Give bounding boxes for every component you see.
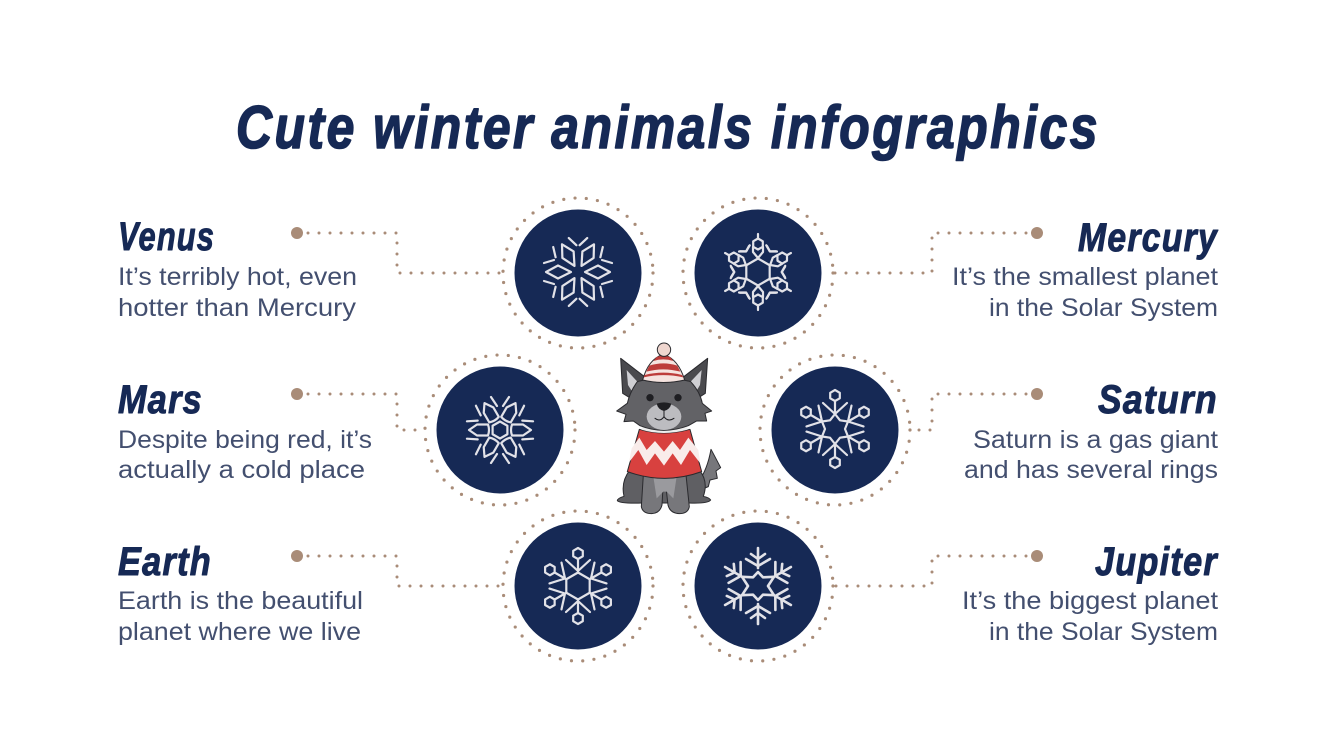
text: Mars description: actually a cold place — [118, 456, 365, 484]
illustration: wolf in winter hat and sweater — [617, 343, 721, 514]
connector: Mars — [291, 388, 426, 430]
heading: Mercury: Mercury — [1078, 216, 1218, 260]
head — [617, 378, 712, 430]
text: Venus description: hotter than Mercury — [118, 294, 357, 322]
connector: Earth — [291, 550, 503, 586]
icon: snowflake badge top left — [503, 198, 653, 348]
panel: Mercury — [952, 216, 1218, 322]
text: Mars description: Despite being red, it’s — [118, 426, 372, 454]
hat pompom — [657, 343, 671, 356]
panel: Jupiter — [962, 540, 1219, 646]
tail — [698, 449, 721, 490]
heading: Jupiter: Jupiter — [1095, 540, 1219, 584]
panel: Mars — [118, 378, 372, 484]
haunches and feet — [617, 470, 711, 503]
text: Saturn description: Saturn is a gas giant — [973, 426, 1218, 454]
icon: snowflake badge bottom left — [503, 511, 653, 661]
icon: snowflake badge bottom right — [683, 511, 833, 661]
front legs — [641, 475, 689, 514]
heading: Earth: Earth — [118, 540, 212, 584]
muzzle — [647, 403, 681, 430]
hat — [643, 354, 685, 382]
panel: Saturn — [964, 378, 1218, 484]
text: Venus description: It’s terribly hot, even — [118, 263, 357, 291]
heading: Mars: Mars — [118, 378, 203, 422]
text: Mercury description: It’s the smallest planet — [952, 263, 1218, 291]
connector: Jupiter — [833, 550, 1043, 586]
title: Cute winter animals infographics — [236, 94, 1100, 161]
text: Jupiter description: in the Solar System — [989, 618, 1218, 646]
belly — [653, 477, 677, 498]
connector: Saturn — [910, 388, 1043, 430]
connector: Venus — [291, 227, 503, 273]
text: Earth description: planet where we live — [118, 618, 361, 646]
icon: snowflake badge middle right — [760, 355, 910, 505]
connector: Mercury — [833, 227, 1043, 273]
text: Jupiter description — [962, 587, 1218, 646]
text: Mercury description — [952, 263, 1218, 322]
sweater zigzag — [629, 438, 700, 466]
text: Saturn description: and has several rings — [964, 456, 1218, 484]
collar — [642, 428, 687, 432]
text: Venus description — [118, 263, 357, 322]
ears — [621, 358, 647, 400]
eyes and nose — [646, 394, 682, 411]
heading: Venus: Venus — [118, 215, 215, 259]
icon: snowflake badge top right — [683, 198, 833, 348]
text: Jupiter description: It’s the biggest planet — [962, 587, 1218, 615]
text: Mars description — [118, 426, 372, 484]
text: Mercury description: in the Solar System — [989, 294, 1218, 322]
panel: Earth — [118, 540, 363, 646]
mouth — [655, 411, 674, 420]
text: Earth description: Earth is the beautiful — [118, 587, 363, 615]
hat stripes — [644, 356, 683, 377]
text: Earth description — [118, 587, 363, 646]
heading: Saturn: Saturn — [1098, 378, 1218, 422]
icon: snowflake badge middle left — [425, 355, 575, 505]
sweater — [627, 429, 702, 478]
panel: Venus — [118, 215, 357, 322]
text: Saturn description — [964, 426, 1218, 484]
